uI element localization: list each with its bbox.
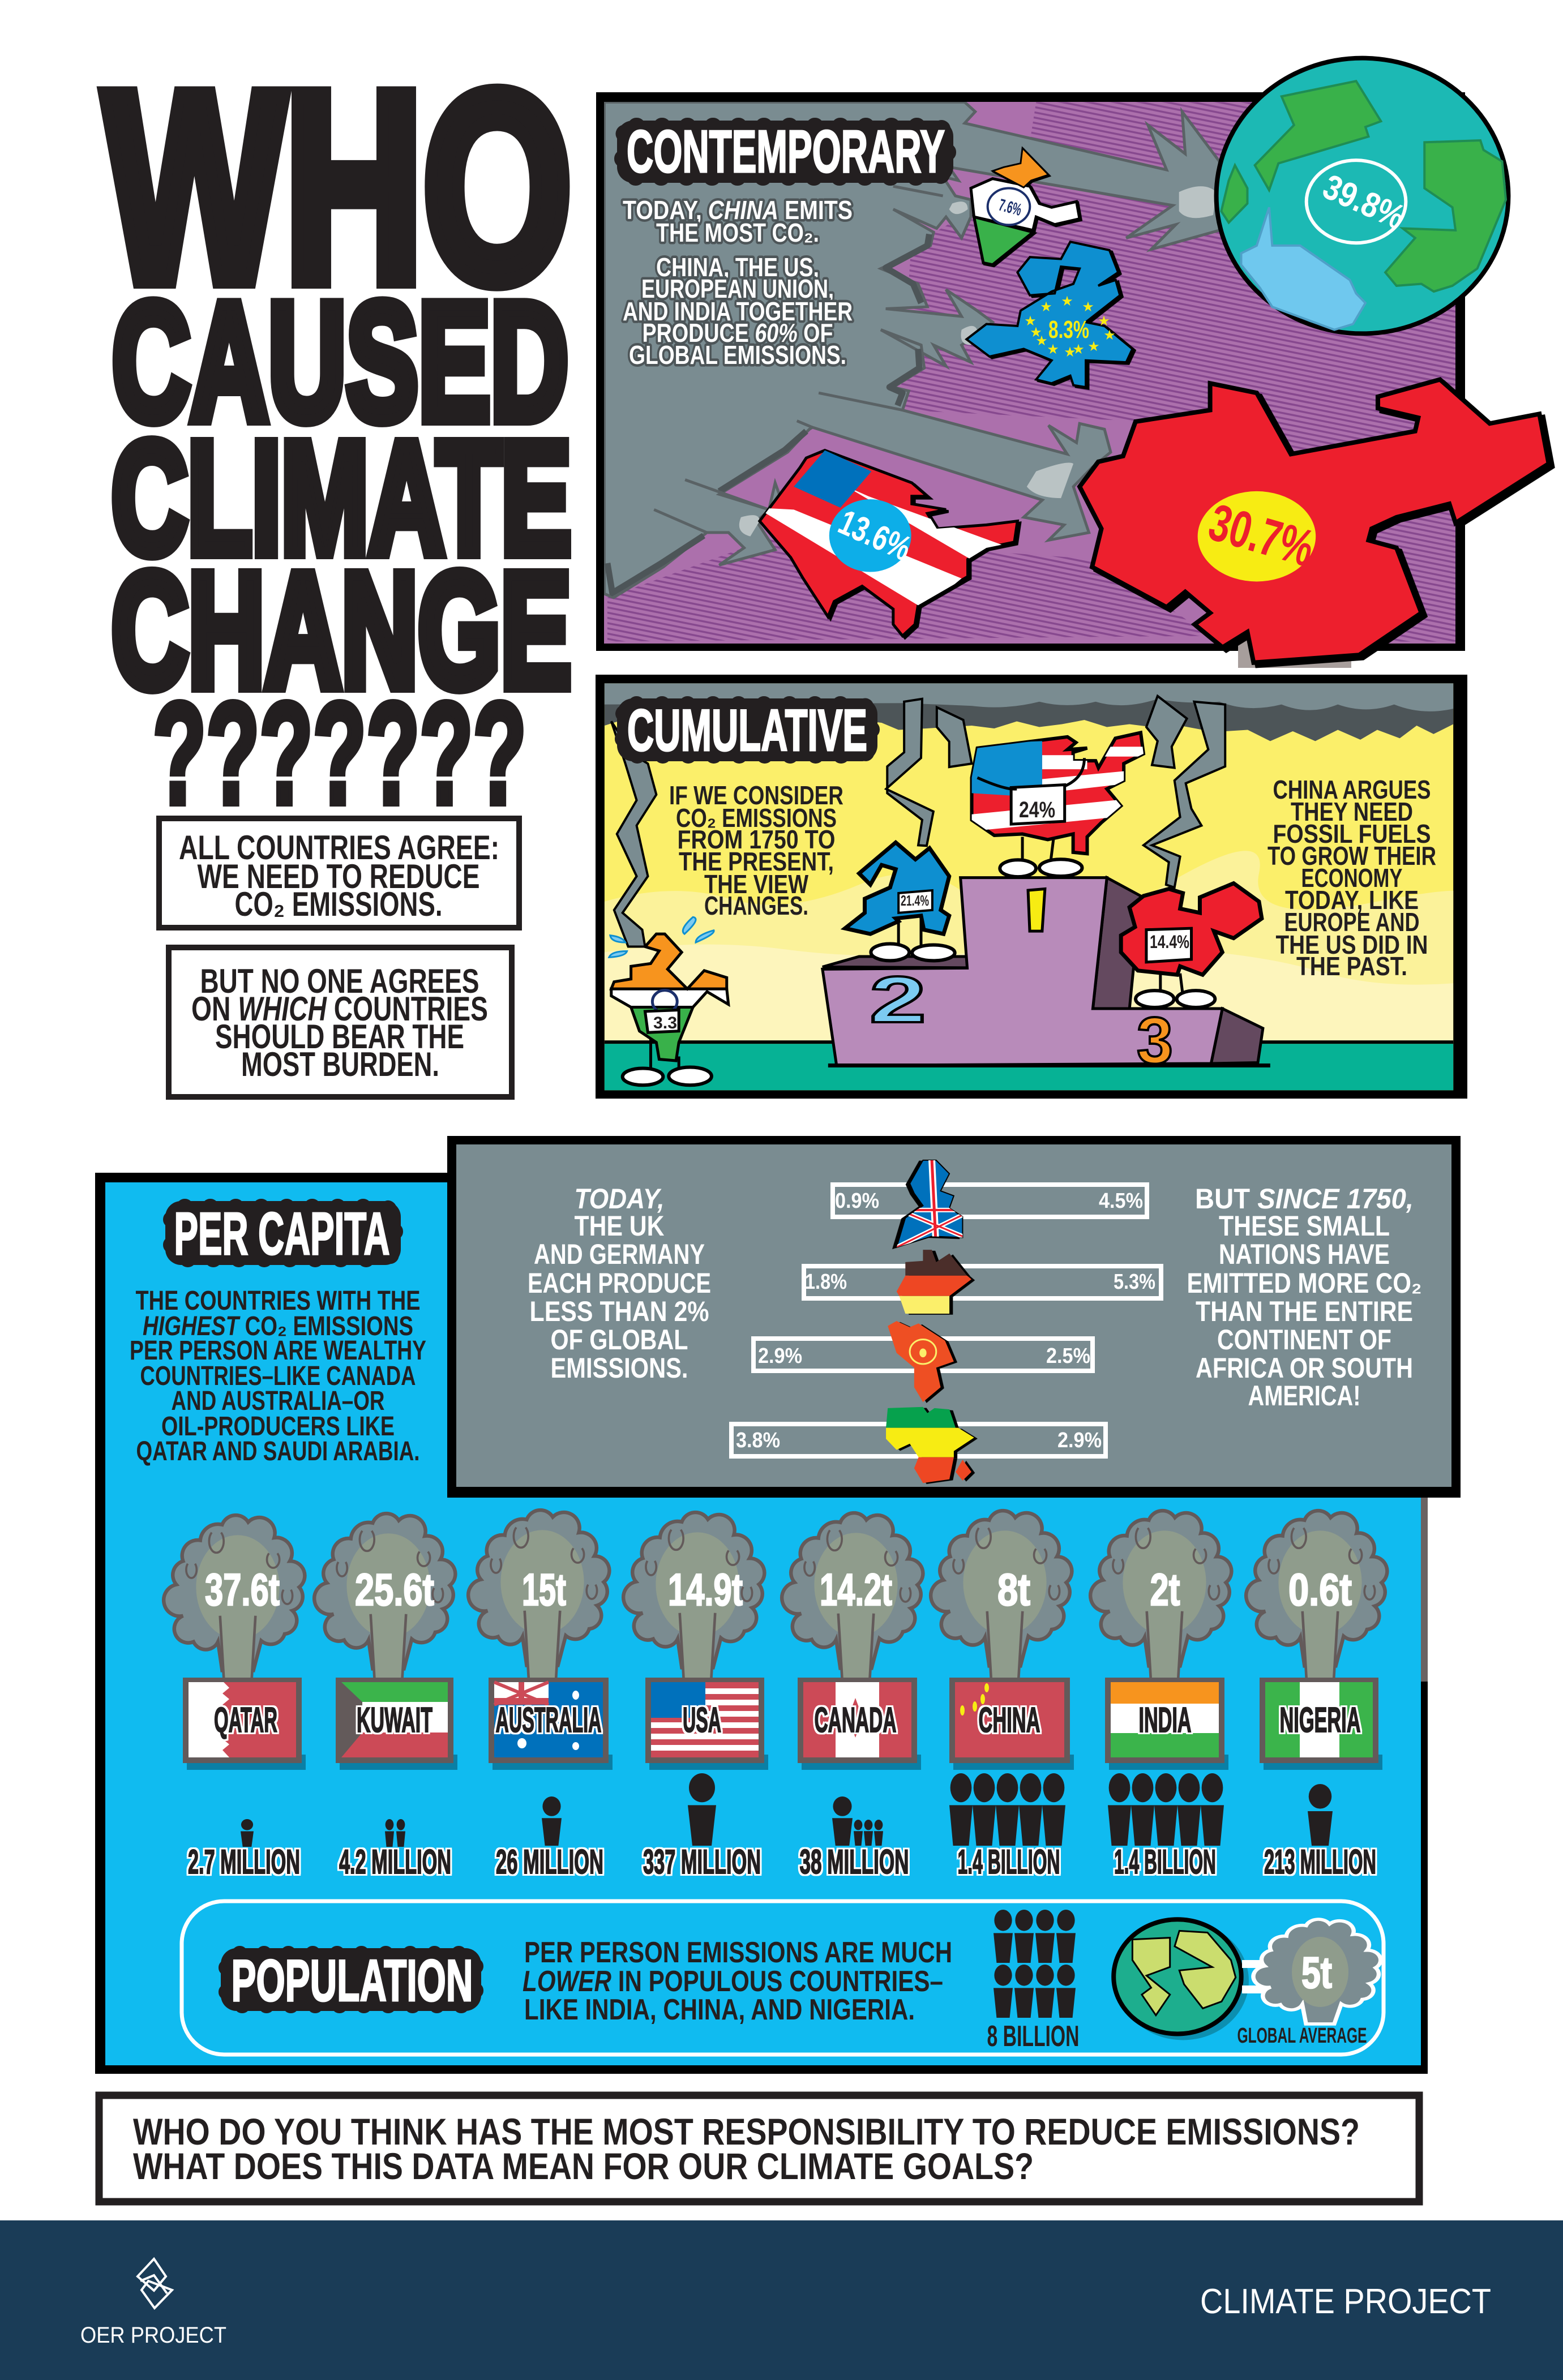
text: contemporary: AND INDIA TOGETHER [623,297,853,326]
text: cumulative left: THE PRESENT, [679,847,834,876]
text: cumulative right [1267,775,1436,981]
callout: question: WHO DO YOU THINK HAS THE MOST RESPONSIBILITY TO REDUCE EMISSIONS? [133,2111,1360,2152]
text: since 1750: EMITTED MORE CO₂ [1187,1267,1422,1299]
icon: earth [1114,1919,1249,2040]
callout: no one agrees [169,947,512,1097]
icon: Germany [897,1250,971,1314]
smoke ceiling [605,683,1453,741]
per capita emission values [205,1564,1352,1615]
flag: Kuwait [336,1678,453,1763]
flag: India: INDIA [1139,1701,1191,1740]
text: contemporary [623,195,853,370]
bar values: 0.9% [835,1189,879,1213]
population labels: 213 MILLION [1264,1843,1376,1881]
icon: global average cloud: GLOBAL AVERAGE [1237,2024,1367,2048]
icon: 8 billion people [987,1910,1079,2053]
character: EU 21.4% [845,842,955,960]
callout: all countries agree: WE NEED TO REDUCE [197,857,480,895]
text: population: LIKE INDIA, CHINA, AND NIGERIA. [524,1993,915,2026]
text: per capita description: QATAR AND SAUDI ARABIA. [136,1436,420,1466]
icon: globe 39.8%: 39.8% [1317,167,1411,237]
per capita emission values: 37.6t [205,1564,280,1615]
text: population: LOWER IN POPULOUS COUNTRIES– [523,1965,943,1998]
text: contemporary: CHINA, THE US, [656,252,819,282]
text: per capita description: OIL-PRODUCERS LIKE [161,1412,395,1442]
panel: small nations comparison [447,1136,1461,1498]
text: since 1750: CONTINENT OF [1217,1324,1391,1356]
bars: emissions share [731,1185,1161,1456]
flag: China [949,1678,1070,1763]
sweat drops [609,917,714,957]
text: since 1750: THESE SMALL [1219,1210,1390,1242]
character: India 3.3 [609,917,729,1085]
title [104,36,572,834]
text: contemporary: PRODUCE 60% OF [642,318,833,348]
text: cumulative left: CO₂ EMISSIONS [676,803,837,833]
podium [823,878,1263,1065]
flag: Nigeria [1260,1678,1378,1763]
population labels: 337 MILLION [643,1843,761,1881]
callout: no one agrees: ON WHICH COUNTRIES [191,990,488,1028]
bar values: 2.9% [758,1344,802,1368]
flag: Australia [489,1678,609,1763]
callout: question [99,2095,1419,2202]
header: population [221,1948,481,2014]
text: per capita description [130,1286,426,1466]
text: cumulative left: CHANGES. [704,891,808,920]
smoke drips [611,696,1225,947]
population labels: 26 MILLION [496,1843,603,1881]
per capita emission values: 15t [522,1564,566,1615]
callout: all countries agree [159,818,519,928]
podium numbers: 2 [870,963,926,1036]
icon: globe 39.8% [1217,58,1508,333]
character: China 14.4% [1121,884,1262,1007]
text: since 1750: AMERICA! [1248,1380,1361,1412]
bar values: 3.8% [736,1429,780,1452]
icon: South America [888,1321,954,1402]
panel: contemporary [596,92,1465,651]
header: contemporary: CONTEMPORARY [627,118,945,185]
population labels: 4.2 MILLION [339,1843,451,1881]
bar values: 2.5% [1046,1344,1090,1368]
bar values: 4.5% [1099,1189,1143,1213]
smoke stream [604,102,1219,598]
text: contemporary: TODAY, CHINA EMITS [623,195,853,225]
character: USA 24%: 24% [1019,797,1055,822]
icon: European Union 8.3%: ★ [1072,342,1085,357]
text: cumulative left: FROM 1750 TO [677,825,836,854]
icon: 8 billion people: 8 BILLION [987,2020,1079,2053]
flag: India [1105,1678,1224,1763]
header: contemporary [617,118,953,185]
icon: UK [897,1159,971,1250]
flag: Kuwait: KUWAIT [357,1701,432,1740]
text: today: LESS THAN 2% [530,1296,709,1327]
icon: India 7.6%: 7.6% [997,196,1024,220]
smoke clouds [164,1510,1387,1686]
text: per capita description: HIGHEST CO₂ EMISSIONS [143,1311,413,1341]
flag shadows [187,1755,1382,1770]
flag: China: CHINA [978,1701,1040,1740]
icon: China 30.7% [1080,380,1549,668]
title: CAUSED [112,268,568,455]
panel: cumulative [596,675,1469,1099]
icon: USA 13.6% [756,451,1017,636]
panel: population [182,1901,1384,2055]
text: cumulative left: IF WE CONSIDER [669,781,843,810]
text: cumulative right: ECONOMY [1301,863,1403,893]
text: per capita description: COUNTRIES–LIKE CANADA [140,1361,416,1391]
population labels: 1.4 BILLION [958,1843,1060,1881]
callout: no one agrees: BUT NO ONE AGREES [200,962,479,1000]
text: cumulative right: EUROPE AND [1284,907,1420,937]
text: cumulative right: TO GROW THEIR [1267,841,1436,870]
icon: OER logo [138,2259,172,2308]
text: per capita description: AND AUSTRALIA–OR [171,1386,385,1416]
text: since 1750: AFRICA OR SOUTH [1196,1352,1413,1384]
header: per capita: PER CAPITA [174,1200,389,1267]
bar values: 1.8% [805,1270,847,1294]
population labels [188,1843,1376,1881]
population labels: 2.7 MILLION [188,1843,300,1881]
text: per capita description: THE COUNTRIES WITH THE [136,1286,420,1316]
text: cumulative right: TODAY, LIKE [1285,885,1419,915]
text: cumulative right: FOSSIL FUELS [1273,819,1431,848]
character: EU 21.4%: 21.4% [901,892,929,909]
flag: USA [645,1678,764,1763]
icon: European Union 8.3%: ★ [1035,333,1048,349]
icon: China 30.7%: 30.7% [1203,493,1320,578]
bar values [736,1189,1155,1452]
icon: European Union 8.3%: ★ [1024,314,1037,329]
character: India 3.3: 3.3 [653,1014,677,1032]
flag: USA: USA [683,1701,721,1740]
text: population [523,1936,952,2026]
text: Climate Project: CLIMATE PROJECT [1200,2282,1491,2321]
text: since 1750 [1187,1183,1422,1412]
per capita emission values: 8t [997,1564,1030,1615]
icon: European Union 8.3%: ★ [1061,294,1073,309]
icon: global average cloud [1237,1919,1381,2048]
text: contemporary: GLOBAL EMISSIONS. [629,340,846,370]
flag: Qatar: QATAR [214,1701,277,1740]
text: today: AND GERMANY [534,1238,705,1270]
panel: cumulative: 3 [1137,1004,1173,1077]
text: cumulative left [669,781,843,920]
icon: European Union 8.3%: ★ [1098,314,1110,329]
text: cumulative right: CHINA ARGUES [1273,775,1431,804]
callout: no one agrees: MOST BURDEN. [241,1045,439,1083]
character: China 14.4%: 14.4% [1150,932,1189,952]
icon: global average cloud: 5t [1301,1948,1332,1997]
text: contemporary: EUROPEAN UNION, [641,274,834,303]
text: cumulative right: THE US DID IN [1276,930,1428,959]
icon: European Union 8.3%: ★ [1082,299,1094,315]
title: ??????? [153,673,526,834]
header: cumulative [617,698,877,764]
footer [0,2220,1563,2380]
purple hatch [607,102,1455,642]
text: today: TODAY, [574,1183,665,1215]
per capita emission values: 14.9t [668,1564,743,1615]
text: since 1750: BUT SINCE 1750, [1195,1183,1414,1215]
title: CLIMATE [112,409,571,587]
text: since 1750: NATIONS HAVE [1219,1238,1390,1270]
text: today: EACH PRODUCE [528,1267,711,1299]
pale sky clouds [605,851,1469,1043]
per capita emission values: 2t [1150,1564,1180,1615]
title: WHO [104,36,572,337]
text: population: PER PERSON EMISSIONS ARE MUCH [524,1936,952,1969]
title: CHANGE [112,539,571,722]
header: population: POPULATION [231,1948,473,2014]
text: cumulative left: THE VIEW [704,869,808,899]
flag: Qatar [183,1678,302,1763]
callout: all countries agree: ALL COUNTRIES AGREE: [179,829,499,867]
character: USA 24% [972,732,1144,877]
panel: per capita [95,1173,1428,2074]
text: cumulative right: THE PAST. [1296,951,1407,981]
population pictograms [241,1773,1333,1847]
callout: all countries agree: CO₂ EMISSIONS. [234,885,443,923]
text: per capita description: PER PERSON ARE WEALTHY [130,1336,426,1366]
population labels: 38 MILLION [799,1843,909,1881]
flag: Canada: CANADA [814,1701,897,1740]
icon: India 7.6% [971,148,1080,265]
text: today: OF GLOBAL [550,1324,688,1356]
icon: European Union 8.3%: ★ [1040,299,1052,315]
text: today [528,1183,711,1384]
flag: Australia: AUSTRALIA [496,1701,601,1740]
per capita emission values: 14.2t [820,1564,892,1615]
text: cumulative right: THEY NEED [1291,797,1413,826]
icon: European Union 8.3% [966,242,1132,387]
icon: European Union 8.3%: ★ [1087,339,1100,354]
icon: European Union 8.3%: 8.3% [1048,316,1089,344]
icons: UK, Germany, South America, Africa [886,1159,974,1483]
header: per capita [165,1200,401,1267]
text: OER Project: OER PROJECT [80,2323,226,2348]
contemporary frame edges [596,92,1465,651]
icon: European Union 8.3%: ★ [1064,345,1076,360]
icon: USA 13.6%: 13.6% [833,503,917,569]
bar values: 5.3% [1114,1270,1155,1294]
header: cumulative: CUMULATIVE [627,698,867,764]
icon: European Union 8.3%: ★ [1103,328,1116,343]
flag: Nigeria: NIGERIA [1279,1701,1361,1740]
population labels: 1.4 BILLION [1114,1843,1216,1881]
icon: European Union 8.3%: ★ [1047,342,1059,357]
callout: no one agrees: SHOULD BEAR THE [215,1018,464,1056]
text: today: THE UK [574,1210,665,1242]
floor [605,1044,1453,1090]
text: since 1750: THAN THE ENTIRE [1196,1296,1413,1327]
icon: Africa [886,1407,974,1483]
per capita emission values: 25.6t [355,1564,434,1615]
bar values: 2.9% [1057,1429,1102,1452]
flag: Canada [798,1678,917,1763]
per capita emission values: 0.6t [1288,1564,1352,1615]
text: today: EMISSIONS. [550,1352,688,1384]
icon: European Union 8.3%: ★ [1030,325,1042,340]
callout: question: WHAT DOES THIS DATA MEAN FOR OUR CLIMATE GOALS? [133,2145,1034,2187]
text: contemporary: THE MOST CO₂. [656,218,819,247]
